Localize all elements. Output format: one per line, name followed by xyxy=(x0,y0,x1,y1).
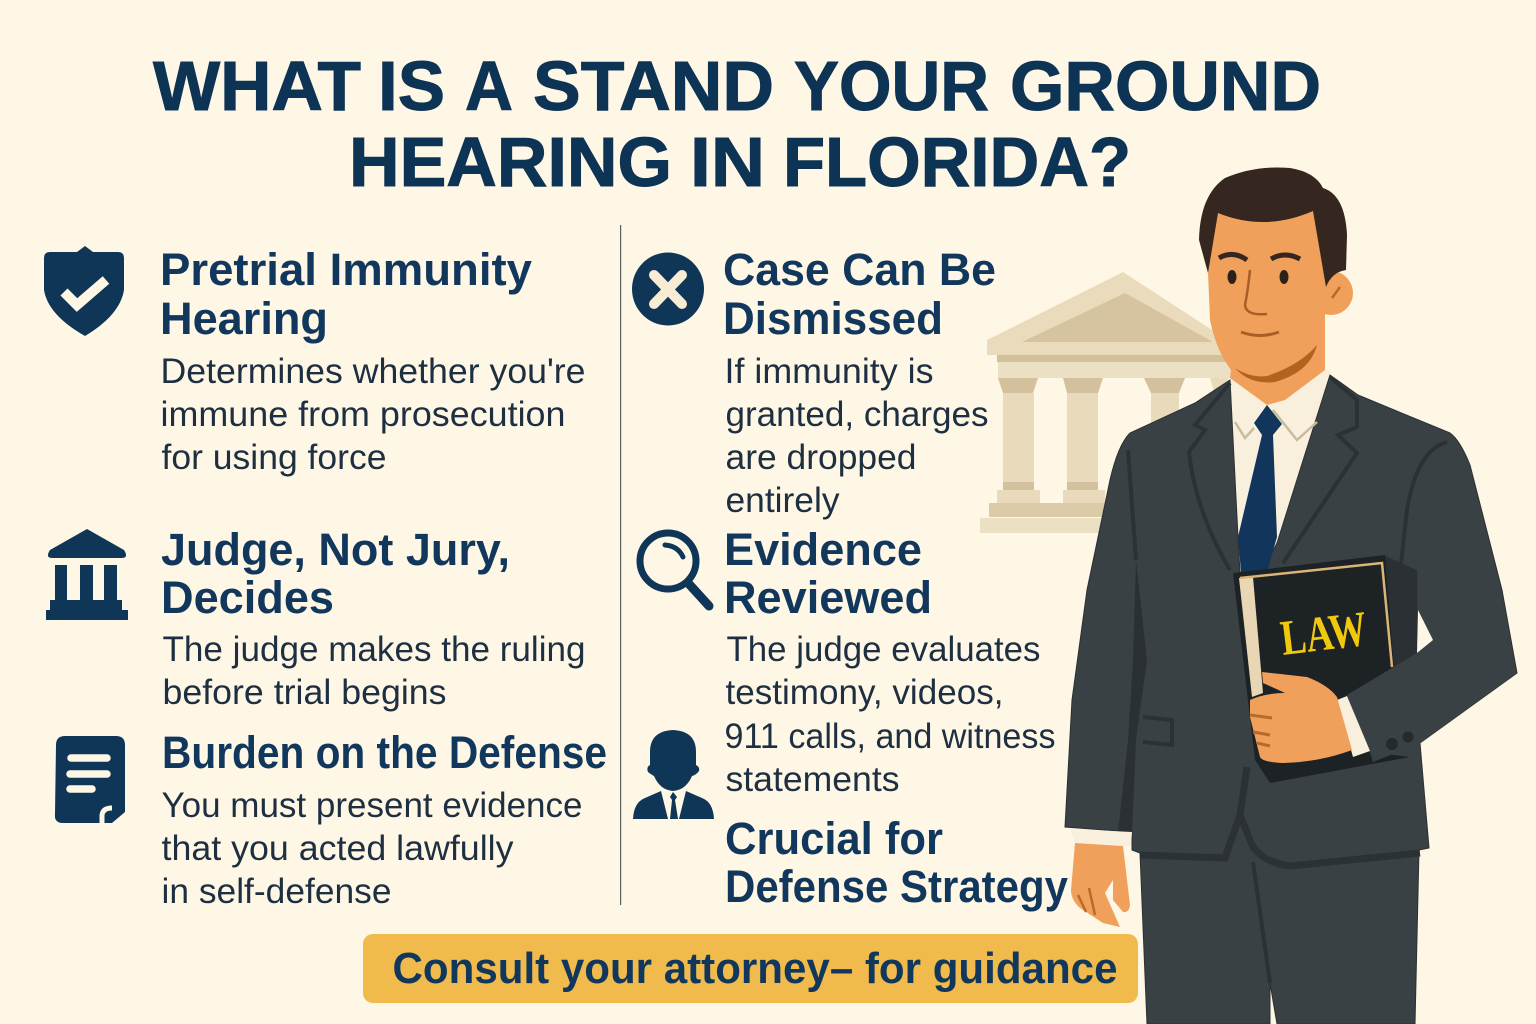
collar lines xyxy=(1235,410,1317,440)
column divider xyxy=(620,225,621,905)
trouser crease xyxy=(1253,862,1270,983)
panel: case can be dismissed: entirely xyxy=(726,481,840,520)
title: YOUR xyxy=(794,47,989,125)
panel: pretrial immunity hearing xyxy=(160,244,586,477)
title xyxy=(153,47,1321,201)
panel: evidence reviewed: The judge evaluates xyxy=(726,630,1040,669)
icon: x in circle xyxy=(632,252,704,326)
panel: judge, not jury, decides: Decides xyxy=(161,572,334,623)
title: HEARING xyxy=(349,123,672,201)
eyes xyxy=(1228,270,1236,284)
mouth xyxy=(1241,332,1279,336)
panel: case can be dismissed: Case Can Be xyxy=(723,244,996,295)
title: WHAT xyxy=(153,47,361,125)
panel: burden on the defense: Burden on the Defense xyxy=(162,727,607,778)
panel: case can be dismissed: are dropped xyxy=(726,438,916,477)
title: GROUND xyxy=(1010,47,1321,125)
ear xyxy=(1309,271,1353,315)
panel: pretrial immunity hearing: Pretrial Immunity xyxy=(160,244,532,295)
panel: evidence reviewed xyxy=(724,524,1056,799)
forearm xyxy=(1347,635,1517,762)
icon: shield with check xyxy=(44,246,124,336)
icon: courthouse xyxy=(46,529,128,620)
book back xyxy=(1233,555,1410,783)
panel: judge, not jury, decides: Judge, Not Jury, xyxy=(161,524,510,575)
hand xyxy=(1250,672,1352,763)
book label: LAW xyxy=(1278,600,1370,666)
panel: judge, not jury, decides: before trial begins xyxy=(162,673,446,712)
face and neck xyxy=(1208,205,1325,405)
panel: burden on the defense xyxy=(162,727,607,911)
panel: judge, not jury, decides: The judge makes the ruling xyxy=(162,630,586,669)
panel: evidence reviewed: Reviewed xyxy=(724,572,932,623)
finger lines xyxy=(1250,715,1272,746)
tie xyxy=(1238,405,1282,572)
panel: pretrial immunity hearing: Hearing xyxy=(160,293,328,344)
panel: evidence reviewed: statements xyxy=(726,760,900,799)
icon: document xyxy=(55,736,125,824)
eyebrows xyxy=(1219,254,1300,260)
title: IS xyxy=(378,47,445,125)
panel: crucial for defense strategy: Defense Strategy xyxy=(725,861,1068,912)
panel: evidence reviewed: 911 calls, and witness xyxy=(724,717,1056,756)
ear line xyxy=(1332,287,1340,298)
hair xyxy=(1199,167,1347,287)
panel: case can be dismissed xyxy=(723,244,996,520)
panel: pretrial immunity hearing: immune from prosecution xyxy=(160,395,566,434)
jaw shadow xyxy=(1235,345,1317,382)
left hand lines xyxy=(1078,888,1095,915)
panel: case can be dismissed: granted, charges xyxy=(726,395,988,434)
courthouse background illustration xyxy=(980,272,1235,533)
icon: attorney silhouette xyxy=(633,730,714,819)
shirt xyxy=(1228,370,1331,560)
panel: judge, not jury, decides xyxy=(161,524,586,712)
panel: burden on the defense: You must present evidence xyxy=(162,786,582,825)
callout: consult your attorney xyxy=(363,934,1138,1003)
book pages xyxy=(1239,577,1263,697)
title: FLORIDA? xyxy=(783,123,1131,201)
book trim xyxy=(1240,563,1392,667)
panel: crucial for defense strategy: Crucial for xyxy=(725,813,943,864)
panel: pretrial immunity hearing: Determines whether you're xyxy=(160,352,586,391)
arm gap xyxy=(1417,610,1433,653)
arm shadow xyxy=(1118,560,1147,832)
left hand xyxy=(1071,843,1130,927)
lawyer figure xyxy=(1065,167,1517,1024)
panel: pretrial immunity hearing: for using force xyxy=(162,438,386,477)
panel: case can be dismissed: Dismissed xyxy=(723,293,943,344)
jacket hem xyxy=(1140,767,1420,866)
title: IN xyxy=(690,123,765,201)
panel: case can be dismissed: If immunity is xyxy=(724,352,934,391)
nose xyxy=(1245,270,1267,314)
dark band behind book xyxy=(1385,556,1418,668)
panel: evidence reviewed: Evidence xyxy=(724,524,922,575)
panel: crucial for defense strategy xyxy=(725,813,1068,912)
cuff xyxy=(1337,696,1370,757)
title: A xyxy=(465,47,513,125)
title: STAND xyxy=(533,47,774,125)
lapels and seams xyxy=(1128,377,1447,745)
panel: evidence reviewed: testimony, videos, xyxy=(726,673,1004,712)
sleeve buttons xyxy=(1386,738,1398,750)
left cuff xyxy=(1070,829,1132,846)
suit xyxy=(1065,375,1517,1024)
callout: consult your attorney: Consult your attorney– for guidance xyxy=(392,944,1118,993)
panel: burden on the defense: that you acted lawfully xyxy=(162,829,514,868)
panel: burden on the defense: in self-defense xyxy=(162,872,392,911)
icon: magnifying glass xyxy=(640,533,709,606)
